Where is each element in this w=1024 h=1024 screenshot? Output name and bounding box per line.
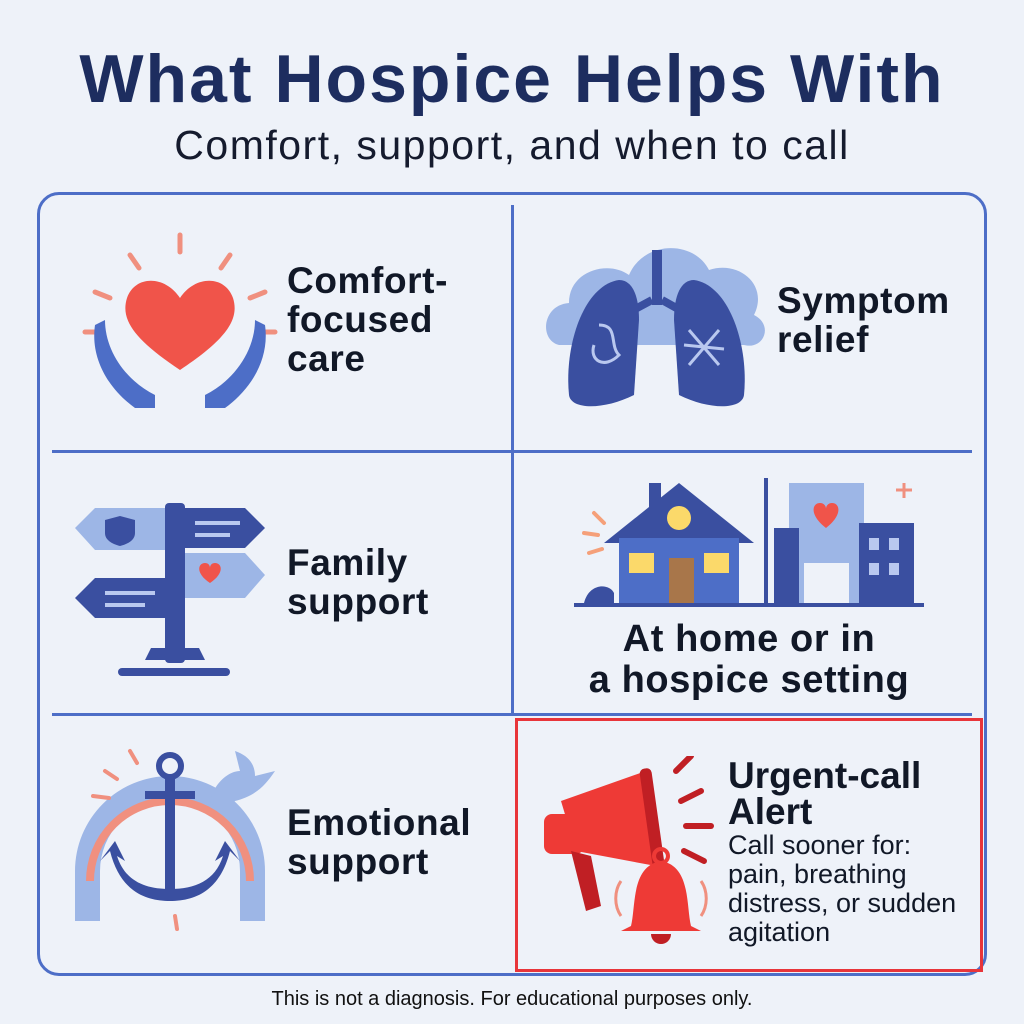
text block — [728, 830, 956, 947]
panel: home or hospice setting — [574, 478, 924, 701]
label: Emotional — [287, 802, 471, 843]
label: At home or in — [623, 618, 875, 660]
label — [589, 618, 909, 701]
text block: Call sooner for: — [728, 830, 911, 860]
heading: Alert — [728, 791, 812, 832]
text block: agitation — [728, 917, 830, 947]
label: support — [287, 841, 429, 882]
heading: Urgent-call — [728, 755, 921, 796]
label — [287, 260, 448, 379]
footer disclaimer: This is not a diagnosis. For educational purposes only. — [271, 988, 752, 1010]
subtitle: Comfort, support, and when to call — [174, 122, 850, 168]
label: a hospice setting — [589, 659, 909, 701]
label: support — [287, 581, 429, 622]
label: Family — [287, 542, 408, 583]
panel: emotional support — [75, 748, 471, 931]
label: relief — [777, 319, 869, 360]
icon: heart in hands — [82, 232, 278, 408]
title: What Hospice Helps With — [79, 41, 945, 117]
icon: house and hospice building — [574, 478, 924, 607]
panel: symptom relief — [546, 248, 950, 406]
main panel frame — [37, 192, 987, 976]
panel: comfort-focused care — [82, 232, 448, 408]
icon: signpost — [75, 503, 265, 676]
label — [287, 542, 429, 622]
label — [287, 802, 471, 882]
label: focused — [287, 299, 433, 340]
panel: family support — [75, 503, 429, 676]
icon: lungs with cloud — [546, 248, 765, 406]
panel: urgent-call alert — [515, 718, 983, 972]
label: Symptom — [777, 280, 950, 321]
text block: pain, breathing — [728, 859, 907, 889]
label: care — [287, 338, 366, 379]
icon: megaphone and bell — [544, 756, 714, 944]
icon: anchor, dove and rainbow — [75, 748, 275, 931]
heading — [728, 755, 921, 832]
text block: distress, or sudden — [728, 888, 956, 918]
label: Comfort- — [287, 260, 448, 301]
label — [777, 280, 950, 360]
